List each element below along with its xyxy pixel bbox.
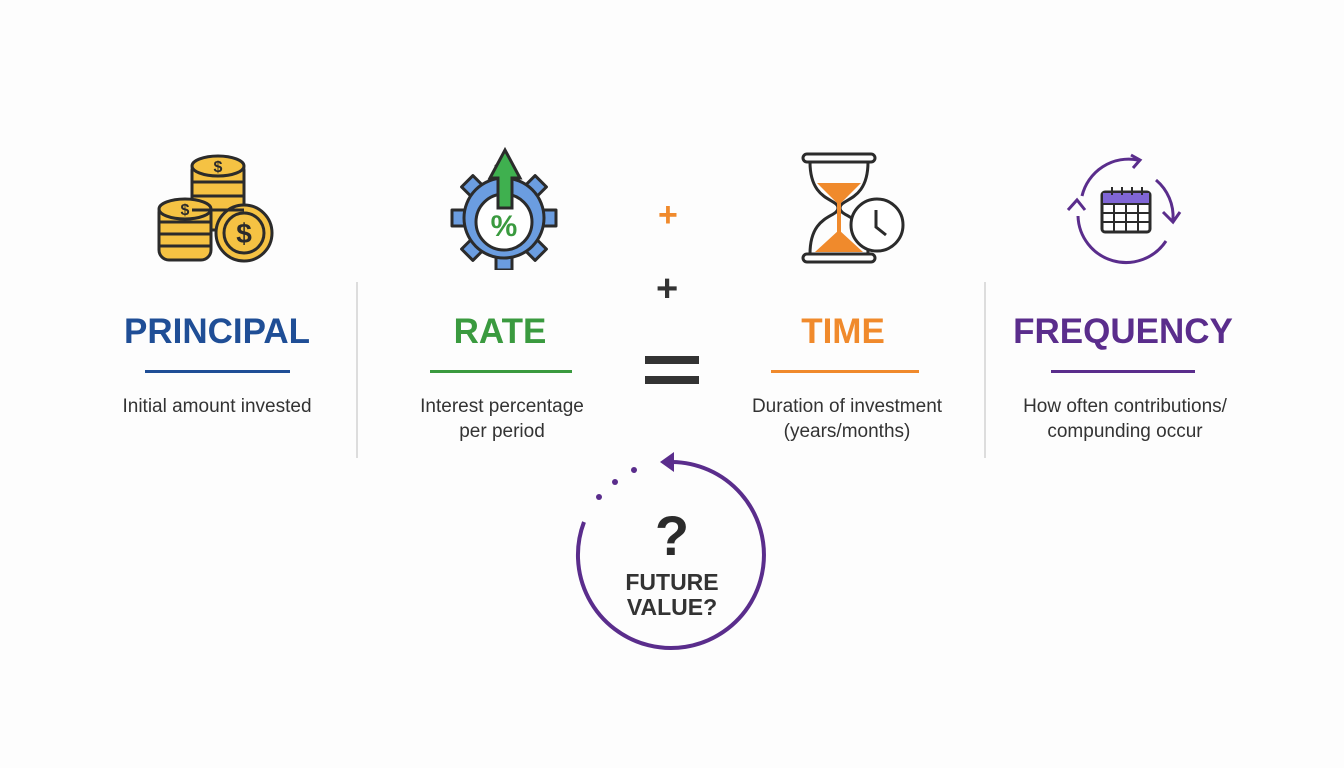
desc: frequency <box>1023 396 1227 442</box>
desc: time: Duration of investment <box>752 396 942 417</box>
icon: gear with percent <box>450 147 558 270</box>
icon: hourglass with clock <box>802 152 904 264</box>
desc: frequency: compunding occur <box>1047 421 1203 442</box>
desc: rate: per period <box>459 421 545 442</box>
future value circle: VALUE? <box>627 594 717 620</box>
future value circle: ? <box>655 504 689 567</box>
title: frequency: FREQUENCY <box>1013 312 1233 351</box>
icon: gear with percent: % <box>491 210 517 243</box>
future value circle <box>576 452 766 650</box>
future value circle: FUTURE <box>625 569 719 595</box>
title: principal: PRINCIPAL <box>124 312 310 351</box>
desc: frequency: How often contributions/ <box>1023 396 1227 417</box>
icon: coins <box>158 154 274 262</box>
icon: coins: $ <box>236 218 252 249</box>
desc: time <box>752 396 942 442</box>
dividers <box>356 282 358 458</box>
desc: time: (years/months) <box>784 421 910 442</box>
desc: principal: Initial amount invested <box>122 396 312 417</box>
icon: coins: $ <box>181 202 190 219</box>
equals sign <box>645 356 699 384</box>
plus orange: + <box>658 196 678 234</box>
icon: calendar cycle <box>1067 154 1182 264</box>
title: rate: RATE <box>454 312 546 351</box>
icon: coins: $ <box>214 159 223 176</box>
plus dark: + <box>656 268 678 310</box>
desc: rate <box>420 396 584 442</box>
desc: rate: Interest percentage <box>420 396 584 417</box>
title: time: TIME <box>801 312 885 351</box>
